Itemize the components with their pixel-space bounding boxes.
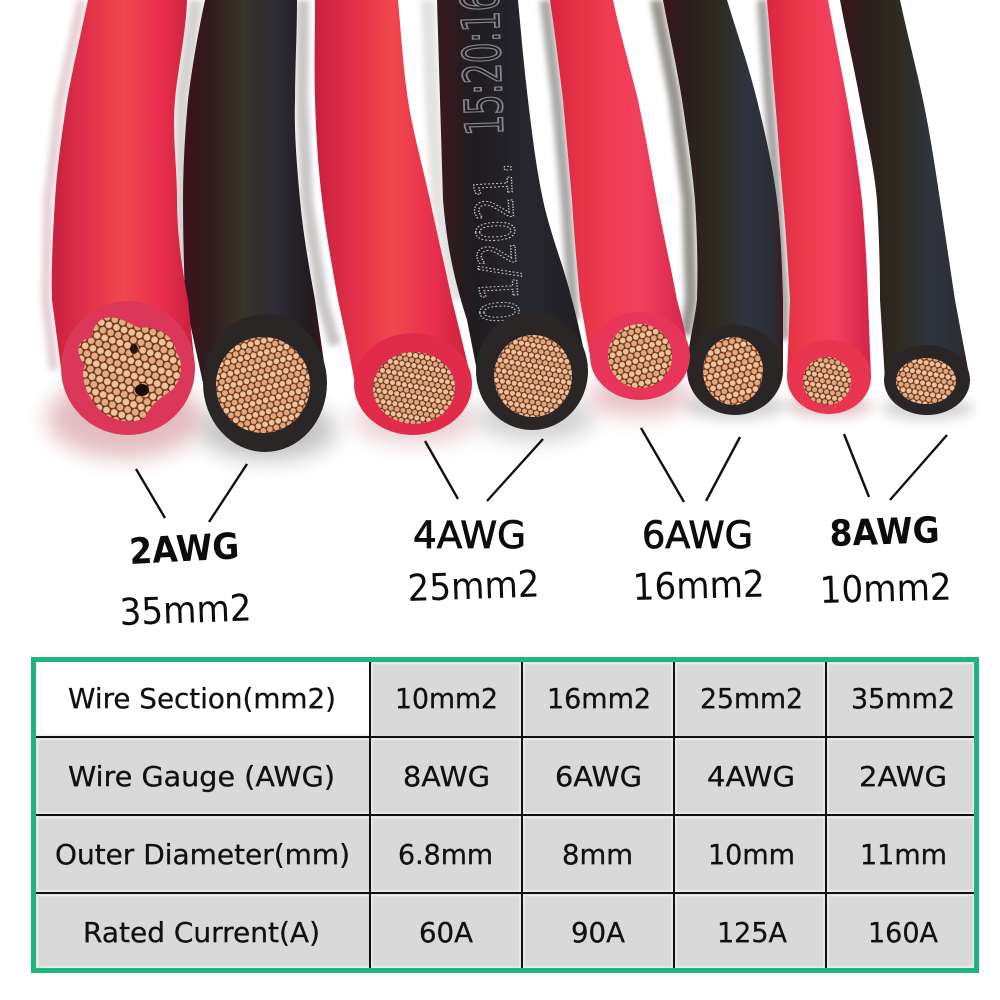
light cell edges	[36, 664, 974, 968]
label: 8AWG 10mm2	[819, 434, 952, 612]
row: outer diameter: 11mm	[860, 838, 947, 871]
red wire end 8AWG	[787, 340, 871, 414]
wire pair 4AWG	[315, 0, 588, 435]
row: wire section: 35mm2	[851, 682, 955, 715]
section text: 25mm2	[407, 562, 540, 610]
row: outer diameter: 10mm	[708, 838, 795, 871]
black wire body 4AWG	[437, 0, 588, 371]
row: outer diameter: Outer Diameter(mm)	[55, 838, 350, 871]
copper core red 4AWG	[373, 352, 455, 424]
row: rated current: Rated Current(A)	[83, 916, 320, 949]
row: wire section: 25mm2	[700, 682, 803, 715]
red wire body 4AWG	[315, 0, 472, 384]
black wire end 4AWG	[476, 312, 588, 430]
pointer lines	[641, 428, 740, 502]
section text: 35mm2	[119, 586, 252, 634]
red wire body 8AWG	[767, 0, 871, 377]
row: rated current: 90A	[571, 916, 625, 949]
row: rated current	[83, 916, 938, 949]
copper core red 6AWG	[608, 324, 672, 388]
copper core red 2AWG	[78, 317, 181, 421]
copper core black 8AWG	[896, 358, 956, 404]
pointer lines	[425, 439, 543, 501]
printed date on black wire: 01/2021.	[464, 162, 532, 324]
row: rated current: 160A	[868, 916, 938, 949]
shadows under wire ends	[47, 376, 973, 460]
row: wire section	[68, 682, 955, 715]
wire pair 6AWG	[550, 0, 783, 415]
row: wire gauge: 6AWG	[555, 760, 642, 793]
row: wire gauge	[68, 760, 947, 793]
row: wire gauge: 8AWG	[403, 760, 490, 793]
row: wire section: Wire Section(mm2)	[68, 682, 336, 715]
green border	[34, 660, 976, 970]
row: outer diameter	[55, 838, 947, 871]
copper core black 4AWG	[494, 335, 572, 417]
gauge text: 4AWG	[413, 514, 526, 557]
copper core black 6AWG	[703, 337, 763, 405]
black wire end 2AWG	[203, 314, 327, 452]
red wire body 6AWG	[550, 0, 689, 356]
label: 2AWG 35mm2	[119, 464, 252, 634]
row: wire gauge: 2AWG	[859, 760, 947, 793]
highlighted header cell	[36, 662, 370, 737]
row: outer diameter: 8mm	[562, 838, 633, 871]
black wire end 8AWG	[884, 345, 970, 415]
label: 4AWG 25mm2	[407, 439, 543, 610]
gauge text: 2AWG	[128, 526, 240, 573]
label: 6AWG 16mm2	[632, 428, 765, 609]
shading in the gaps between wires	[46, 0, 784, 370]
black wire end 6AWG	[687, 325, 783, 415]
gauge text: 8AWG	[829, 510, 940, 555]
row: rated current: 60A	[419, 916, 473, 949]
specification table	[33, 659, 976, 971]
black wire body 8AWG	[840, 0, 970, 380]
black wire body 2AWG	[183, 0, 327, 383]
row: outer diameter: 6.8mm	[398, 838, 493, 871]
row: rated current: 125A	[717, 916, 787, 949]
row: wire section: 10mm2	[395, 682, 498, 715]
row: wire section: 16mm2	[547, 682, 651, 715]
red wire end 6AWG	[590, 312, 690, 400]
cell grid lines	[36, 660, 975, 970]
black wire body 6AWG	[663, 0, 783, 370]
row: wire gauge: Wire Gauge (AWG)	[68, 760, 335, 793]
copper core black 2AWG	[216, 337, 310, 433]
table background	[33, 659, 976, 971]
red wire body 2AWG	[52, 0, 195, 368]
section text: 16mm2	[632, 563, 765, 609]
gauge text: 6AWG	[642, 514, 753, 557]
row: wire gauge: 4AWG	[707, 760, 795, 793]
red wire end 2AWG	[61, 301, 195, 435]
pointer lines	[844, 434, 947, 500]
copper core red 8AWG	[803, 357, 851, 405]
wire pair 2AWG	[52, 0, 327, 452]
pointer lines	[136, 464, 247, 522]
section text: 10mm2	[819, 566, 952, 612]
red wire end 4AWG	[354, 333, 472, 435]
wire pair 8AWG	[767, 0, 970, 415]
